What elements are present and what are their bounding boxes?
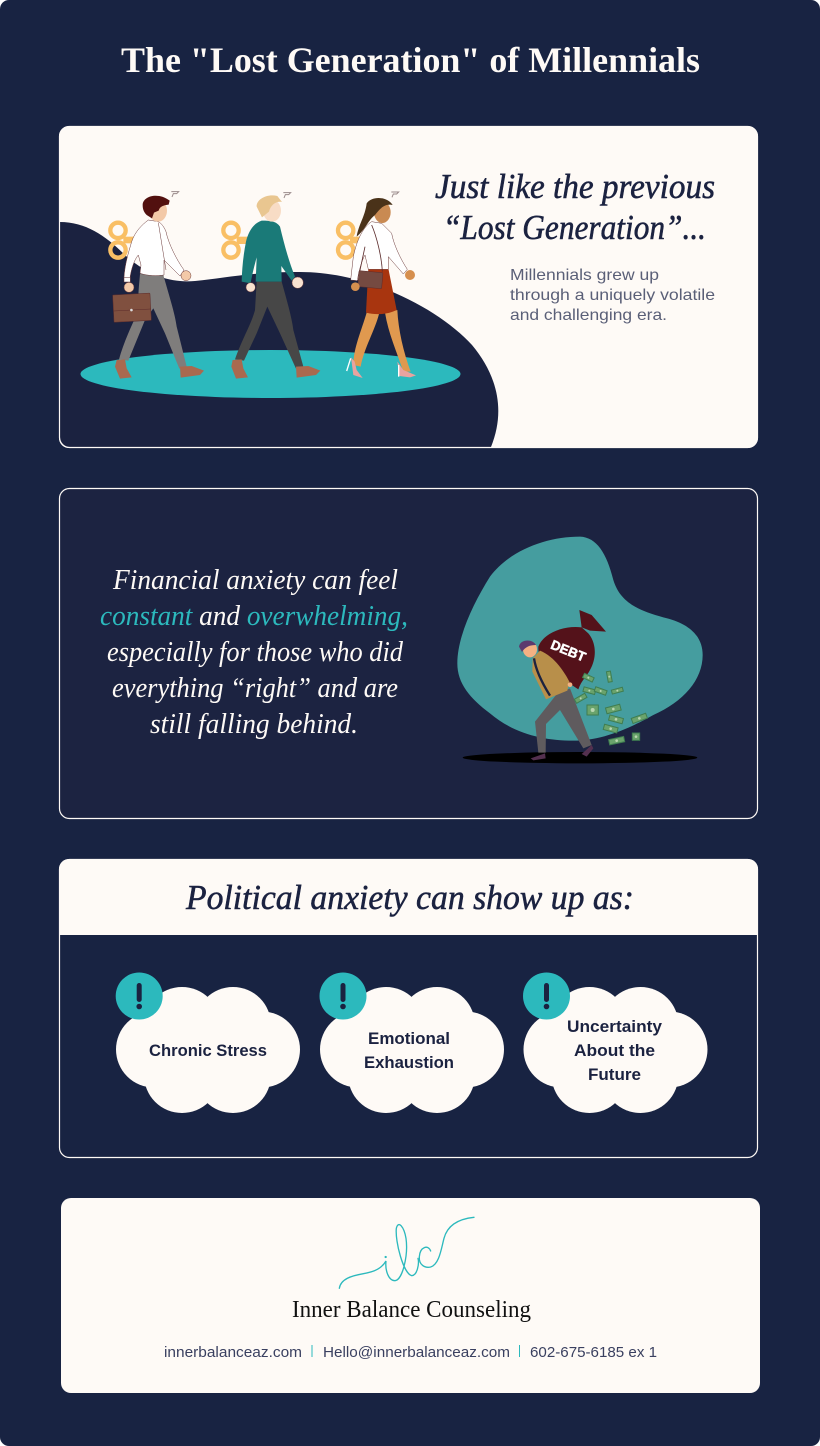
icon: alert [523, 972, 570, 1020]
illustration: man carrying debt bag [457, 537, 703, 763]
teal floor ellipse [80, 350, 460, 398]
text block: financial anxiety [100, 565, 408, 740]
cloud: chronic stress: Chronic Stress [149, 1041, 267, 1060]
cloud: uncertainty about the future: Future [588, 1065, 641, 1084]
logo name: Inner Balance Counseling [292, 1297, 531, 1323]
cloud: emotional exhaustion: Emotional [368, 1029, 450, 1048]
cloud: chronic stress [116, 972, 300, 1113]
text block: millennials [510, 267, 715, 324]
text block: financial anxiety: everything “right” and are [112, 673, 398, 704]
contact details [164, 1344, 657, 1361]
text block: financial anxiety: constant and overwhelming, [100, 601, 408, 632]
heading: just like [435, 167, 715, 247]
contact details: 602-675-6185 ex 1 [530, 1344, 657, 1361]
cloud: uncertainty about the future: Uncertainty [567, 1017, 663, 1036]
panel: lost generation [59, 126, 758, 448]
illustration: man carrying debt bag: DEBT [549, 637, 588, 665]
text block: millennials: through a uniquely volatile [510, 287, 715, 304]
panel: footer [61, 1198, 760, 1393]
panel border [60, 126, 758, 448]
title: The "Lost Generation" of Millennials [121, 40, 700, 80]
text block: financial anxiety: especially for those who did [107, 637, 404, 668]
heading: just like: Just like the previous [435, 167, 715, 206]
dark background shape [60, 222, 498, 447]
illustration: woman with bag [338, 192, 416, 378]
heading: just like: “Lost Generation”... [443, 208, 706, 247]
heading band [59, 859, 758, 935]
text block: financial anxiety: Financial anxiety can feel [112, 565, 398, 596]
cloud: uncertainty about the future [523, 972, 708, 1113]
illustration: man in teal sweater [223, 193, 320, 379]
contact details: innerbalanceaz.com [164, 1344, 302, 1361]
panel: financial anxiety [60, 488, 758, 818]
panel: political anxiety [59, 859, 758, 1158]
text block: millennials: and challenging era. [510, 307, 667, 324]
text block: financial anxiety: still falling behind. [150, 709, 358, 740]
text block: millennials: Millennials grew up [510, 267, 659, 284]
contact details: Hello@innerbalanceaz.com [323, 1344, 510, 1361]
illustration: man with briefcase [110, 192, 204, 379]
cloud: uncertainty about the future: About the [574, 1041, 655, 1060]
cloud: emotional exhaustion: Exhaustion [364, 1053, 454, 1072]
cloud: emotional exhaustion [320, 972, 504, 1113]
logo mark [339, 1217, 474, 1288]
money [574, 671, 647, 745]
icon: alert [320, 972, 366, 1020]
heading: political anxiety: Political anxiety can show up as: [185, 878, 634, 917]
icon: alert [116, 972, 163, 1020]
